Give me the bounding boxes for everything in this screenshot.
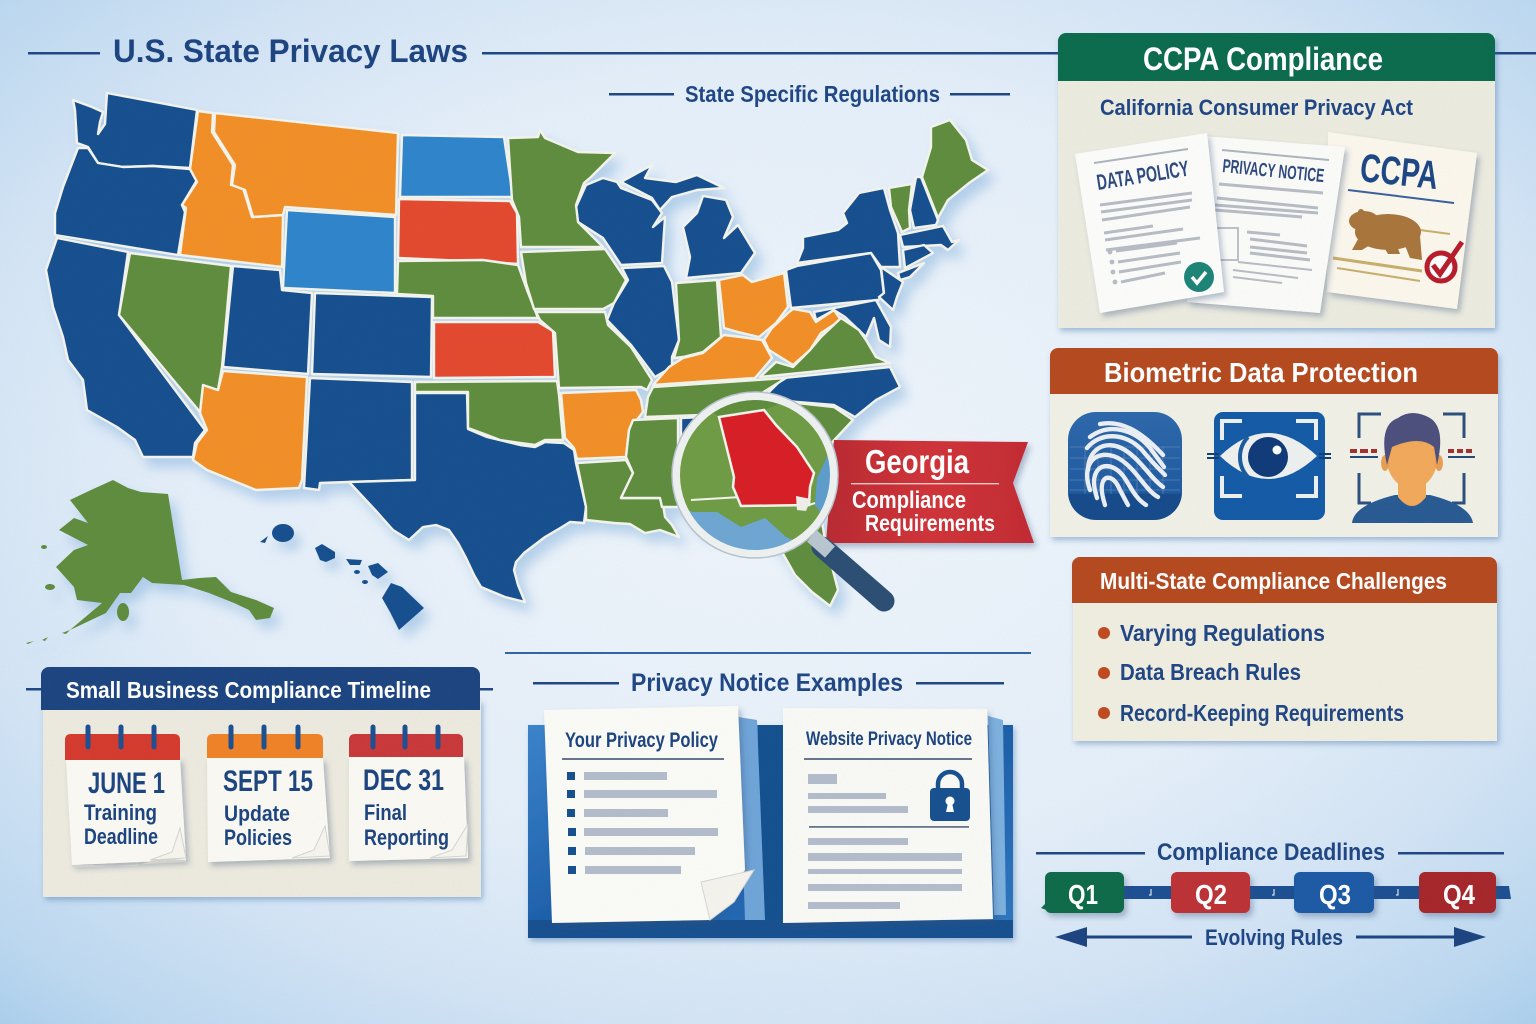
- document: data policy: [1075, 133, 1224, 313]
- calendar: Dec 31 final reporting: DEC 31: [363, 764, 444, 797]
- state group: red states: [398, 199, 555, 378]
- subheading: California Consumer Privacy Act: California Consumer Privacy Act: [1100, 95, 1414, 120]
- calendar: Sept 15 update policies: SEPT 15: [223, 765, 313, 798]
- icon: green check badge: [1184, 262, 1214, 292]
- lens view: Georgia state: [680, 400, 830, 550]
- calendar: June 1 training deadline: Training: [84, 800, 157, 825]
- callout banner: Georgia compliance requirements: Requirements: [865, 510, 995, 536]
- alaska: [26, 480, 274, 644]
- calendar: Dec 31 final reporting: Reporting: [364, 825, 449, 850]
- panel header: CCPA Compliance: [1058, 33, 1495, 81]
- panel header: Small Business Compliance Timeline: [41, 667, 480, 710]
- heading: Privacy Notice Examples: Privacy Notice Examples: [631, 669, 903, 697]
- quarter: Q3: [1294, 872, 1374, 913]
- icon: face recognition: [1350, 413, 1475, 523]
- panel: multi-state compliance challenges: [1072, 557, 1497, 741]
- quarter: Q4: Q4: [1443, 879, 1475, 910]
- calendar: Sept 15 update policies: Update: [224, 801, 290, 826]
- quarter: Q2: Q2: [1195, 879, 1227, 910]
- icon: eye scan: [1207, 412, 1331, 520]
- panel header: Multi-State Compliance Challenges: [1072, 557, 1497, 603]
- calendar: Dec 31 final reporting: Final: [364, 800, 407, 825]
- magnifying glass over Georgia: [670, 390, 884, 601]
- panel header: Multi-State Compliance Challenges: Multi-State Compliance Challenges: [1100, 568, 1447, 594]
- icon: padlock: [930, 772, 970, 821]
- document: data policy: DATA POLICY: [1095, 156, 1191, 195]
- state group: dark blue states: [46, 93, 959, 602]
- list item: Record-Keeping Requirements: Record-Keeping Requirements: [1120, 700, 1404, 726]
- label: Evolving Rules: Evolving Rules: [1205, 925, 1343, 950]
- subtitle: state specific regulations: State Specific Regulations: [685, 81, 940, 107]
- icon: fingerprint: [1068, 412, 1182, 520]
- icon: red check badge: [1427, 242, 1462, 281]
- icon: curled page corner: [701, 870, 754, 920]
- panel header: Biometric Data Protection: Biometric Data Protection: [1104, 357, 1418, 388]
- arrow: left: [1055, 927, 1192, 947]
- map of the United States: [46, 93, 988, 606]
- document: your privacy policy: Your Privacy Policy: [565, 729, 718, 752]
- document: your privacy policy: [544, 706, 754, 923]
- calendar: Sept 15 update policies: [207, 727, 330, 862]
- state group: green states: [119, 120, 988, 606]
- state group: light blue states: [283, 135, 513, 293]
- icon: California bear: [1349, 209, 1422, 260]
- timeline ticks: [1149, 889, 1398, 895]
- document: privacy notice: PRIVACY NOTICE: [1222, 156, 1325, 187]
- callout banner: Georgia compliance requirements: Compliance: [852, 487, 966, 514]
- heading: Compliance Deadlines: Compliance Deadlines: [1157, 839, 1385, 866]
- folder: [528, 716, 1013, 938]
- section: privacy notice examples: [505, 652, 1031, 938]
- section: compliance deadlines: [1036, 839, 1511, 950]
- document: website privacy notice: Website Privacy Notice: [806, 729, 972, 750]
- panel: CCPA compliance: [1058, 33, 1536, 328]
- quarter: Q4: [1419, 872, 1496, 913]
- lens ring: [676, 396, 834, 554]
- document: privacy notice: [1187, 136, 1345, 313]
- calendar: Sept 15 update policies: Policies: [224, 825, 292, 850]
- document: CCPA with bear: [1327, 132, 1477, 309]
- timeline bar: [1120, 886, 1511, 899]
- panel: biometric data protection: [1050, 348, 1498, 537]
- icon: handle: [812, 536, 884, 601]
- callout banner: Georgia compliance requirements: [826, 440, 1034, 543]
- quarter: Q1: Q1: [1068, 879, 1098, 910]
- quarter: Q3: Q3: [1319, 879, 1351, 910]
- document: CCPA with bear: CCPA: [1358, 146, 1440, 198]
- calendar: June 1 training deadline: Deadline: [84, 824, 158, 849]
- calendar: Dec 31 final reporting: [349, 727, 468, 861]
- title: U.S. State Privacy Laws: [113, 33, 468, 69]
- panel: small business compliance timeline: [26, 667, 493, 897]
- list item: Data Breach Rules: Data Breach Rules: [1120, 659, 1301, 685]
- calendar: June 1 training deadline: JUNE 1: [88, 767, 165, 800]
- list item: Varying Regulations: Varying Regulations: [1120, 620, 1325, 646]
- document: website privacy notice: [783, 708, 993, 923]
- quarter: Q1: [1041, 872, 1124, 913]
- hawaii: [260, 524, 424, 630]
- calendar: June 1 training deadline: [65, 727, 186, 868]
- quarter: Q2: [1171, 872, 1250, 913]
- arrow: right: [1356, 927, 1486, 947]
- panel header: CCPA Compliance: CCPA Compliance: [1143, 41, 1383, 77]
- panel header: Small Business Compliance Timeline: Small Business Compliance Timeline: [66, 677, 431, 703]
- callout banner: Georgia compliance requirements: Georgia: [865, 443, 970, 480]
- panel header: Biometric Data Protection: [1050, 348, 1498, 394]
- state group: orange states: [180, 111, 841, 490]
